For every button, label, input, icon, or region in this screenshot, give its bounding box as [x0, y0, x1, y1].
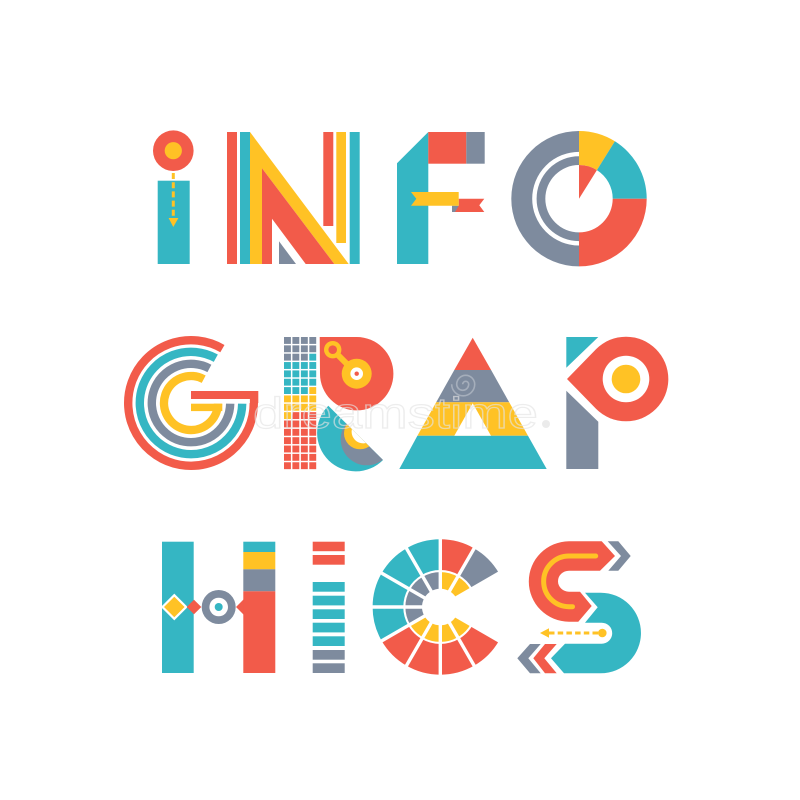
- teal arc: [140, 352, 242, 454]
- white inner triangle: [454, 403, 491, 436]
- teal tier: [399, 436, 547, 469]
- teal sector: [597, 141, 647, 199]
- red arc: [128, 340, 254, 466]
- yellow arc: [164, 376, 218, 430]
- letter P: map pin: [566, 337, 668, 469]
- letter C: segmented radial chart: [368, 535, 512, 679]
- gray arc: [152, 364, 230, 442]
- watermark: dreamstime: [253, 389, 538, 438]
- letter I (second): stacked bars: [313, 542, 345, 673]
- letter N: stripes: [227, 132, 360, 264]
- infographic lettering canvas: [124, 130, 668, 675]
- red tier: [454, 338, 491, 370]
- red bar 1: [313, 542, 345, 551]
- letter I (first): pin with dashed arrow: [153, 130, 194, 264]
- teal corner: [566, 337, 598, 368]
- right bar yellow segment: [243, 552, 275, 569]
- gray bars: [313, 650, 345, 673]
- gray tier: [436, 370, 509, 402]
- top red block: [428, 132, 466, 164]
- letter A: layered pyramid: [399, 338, 547, 469]
- stem: [158, 181, 190, 264]
- left red bar: [227, 132, 237, 264]
- left teal bar: [162, 542, 194, 673]
- yellow tier: [417, 402, 528, 436]
- gray top chevron: [608, 541, 631, 571]
- red teardrop: [567, 337, 668, 421]
- letter G: concentric arcs: [128, 340, 258, 466]
- red crossbar: [191, 391, 258, 403]
- red pointer: [236, 599, 244, 615]
- teal bars: [313, 582, 345, 646]
- red wedge: [579, 165, 597, 199]
- yellow centre: [612, 365, 640, 393]
- white diamond with yellow centre: [161, 594, 188, 620]
- red bar 2: [313, 555, 345, 565]
- watermark: [253, 375, 550, 438]
- top gray block: [466, 132, 485, 164]
- teal lower band: [551, 593, 641, 673]
- outer ring segments: [388, 555, 486, 659]
- yellow crossbar: [191, 404, 222, 411]
- white ring: [534, 154, 579, 243]
- gray triangle: [279, 241, 296, 264]
- pin circle: [153, 130, 194, 171]
- right bar teal segment: [243, 542, 275, 552]
- letter O: donut chart: [511, 131, 647, 266]
- gray half: [511, 131, 579, 266]
- letter F: ribbons: [397, 132, 485, 264]
- pin centre: [165, 142, 182, 159]
- gray target: [202, 590, 236, 624]
- leg: half disc with nested circles: [317, 406, 383, 472]
- letter H: bars linked by nodes: [161, 542, 275, 673]
- yellow dashed arrow: [540, 628, 607, 638]
- right teal bar: [350, 132, 360, 264]
- right red bar: [323, 132, 333, 226]
- gray stem: [566, 391, 598, 469]
- red bottom chevron: [533, 644, 557, 673]
- red upper band: [529, 541, 615, 622]
- dashed arrow: [169, 173, 178, 227]
- red ribbon: [455, 199, 484, 212]
- yellow ribbon: [411, 192, 459, 206]
- stem: [397, 132, 428, 264]
- yellow inner curve: [544, 556, 596, 607]
- yellow sector: [579, 131, 615, 170]
- left teal bar: [240, 132, 250, 264]
- right bar red segment: [243, 591, 275, 673]
- red diamond: [187, 600, 201, 614]
- letter S: arrows and path: [517, 541, 641, 673]
- yellow diagonal: [250, 132, 349, 264]
- right bar gray segment: [243, 569, 275, 591]
- letter R: grid, bowl and leg: [284, 337, 393, 471]
- red sector: [579, 199, 647, 266]
- right yellow bar: [336, 132, 346, 243]
- red bowl: [320, 337, 393, 410]
- waffle grid: [284, 337, 316, 469]
- white ring: [603, 356, 649, 402]
- inner ring segments: [414, 580, 463, 634]
- ribbon fold: [452, 206, 459, 212]
- red diagonal: [262, 168, 334, 264]
- gray bottom chevron: [517, 644, 541, 673]
- icon: yellow key connector: [324, 341, 372, 389]
